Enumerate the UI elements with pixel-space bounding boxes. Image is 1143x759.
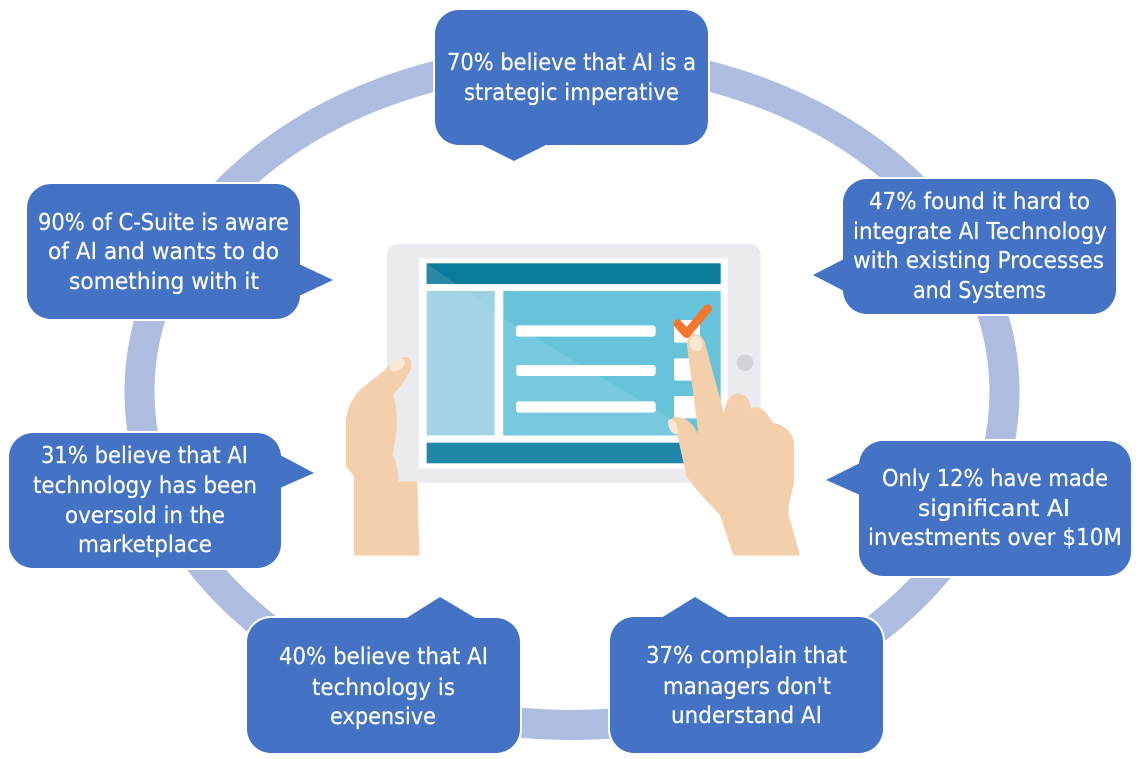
list lines	[516, 325, 656, 413]
callout: 37% managers don't understand: understand AI	[671, 703, 822, 729]
screen main panel	[503, 291, 721, 435]
callout: 31% oversold: technology has been	[33, 473, 257, 499]
callout: 31% oversold: oversold in the	[65, 503, 225, 529]
callout: only 12% significant investments	[826, 441, 1131, 576]
callout: 47% hard to integrate	[813, 179, 1116, 314]
callout: 37% managers don't understand	[610, 597, 883, 753]
callout: 40% expensive: expensive	[330, 704, 436, 730]
callout: 31% oversold	[9, 433, 314, 568]
tablet body	[387, 244, 761, 483]
screen sidebar	[427, 291, 495, 435]
screen bottom bar	[427, 443, 721, 463]
callout: only 12% significant investments: significant AI	[918, 496, 1070, 522]
callout: 70% strategic imperative: strategic imperative	[464, 80, 679, 106]
checkboxes	[674, 320, 700, 418]
callout: 40% expensive	[247, 597, 520, 753]
right hand pointing	[666, 334, 800, 556]
callout: 47% hard to integrate: and Systems	[913, 278, 1046, 304]
callout: 37% managers don't understand: managers don't	[663, 674, 831, 700]
callout: 47% hard to integrate: integrate AI Technology	[853, 219, 1107, 245]
callout: 70% strategic imperative	[435, 10, 708, 161]
callout: only 12% significant investments: investments over $10M	[868, 525, 1122, 551]
left hand	[346, 356, 419, 556]
callout: 47% hard to integrate: with existing Processes	[853, 248, 1104, 274]
callout: 37% managers don't understand: 37% complain that	[646, 643, 847, 669]
tablet home button	[737, 354, 753, 371]
callout: 40% expensive: technology is	[312, 675, 455, 701]
callout: 40% expensive: 40% believe that AI	[279, 644, 488, 670]
callout: 70% strategic imperative: 70% believe that AI is a	[447, 50, 696, 76]
callout: 47% hard to integrate: 47% found it hard to	[869, 189, 1090, 215]
screen top bar	[427, 263, 721, 284]
callout: 90% C-Suite aware: something with it	[69, 269, 259, 295]
tablet screen	[419, 258, 728, 468]
callout: 31% oversold: 31% believe that AI	[41, 443, 248, 469]
callout: only 12% significant investments: Only 12% have made	[882, 466, 1108, 492]
tablet illustration with hands	[346, 244, 800, 556]
callout: 90% C-Suite aware: of AI and wants to do	[48, 239, 279, 265]
callout: 31% oversold: marketplace	[78, 532, 212, 558]
ring connecting the callouts	[140, 59, 1004, 725]
callout: 90% C-Suite aware: 90% of C-Suite is aware	[38, 210, 289, 236]
callout: 90% C-Suite aware	[27, 184, 333, 319]
icon: orange checkmark	[678, 309, 708, 334]
